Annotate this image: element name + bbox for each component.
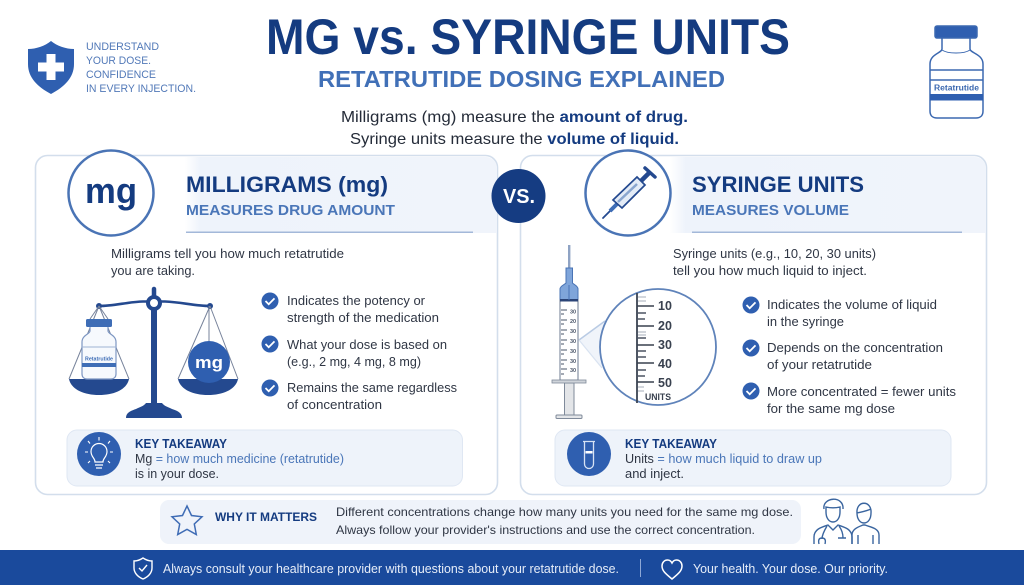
icon: heart [662, 560, 682, 579]
patient [852, 503, 879, 544]
banner text: Always follow your provider's instructions and use the correct concentration. [336, 523, 755, 537]
subtitle: RETATRUTIDE DOSING EXPLAINED [318, 66, 725, 92]
vial on scale: Retatrutide [85, 356, 113, 362]
key takeaway: milligrams [67, 430, 462, 486]
bullet: concentration [742, 340, 943, 372]
takeaway text: Units = how much liquid to draw up [625, 452, 822, 466]
brand badge [28, 41, 196, 95]
icon: mg circle [68, 150, 154, 236]
icon: mg circle: mg [85, 170, 137, 211]
description [673, 246, 876, 278]
bullet: volume: Indicates the volume of liquid [767, 297, 937, 312]
bullet: same regardless: of concentration [287, 397, 382, 412]
bullet list [262, 292, 457, 412]
icon: vial top right: Retatrutide [934, 84, 980, 92]
bullet: dose basis: (e.g., 2 mg, 4 mg, 8 mg) [287, 354, 421, 369]
brand tagline: UNDERSTAND [86, 41, 159, 53]
panel header tint [670, 157, 986, 233]
intro text [341, 109, 688, 148]
vs badge: VS. [503, 186, 535, 208]
syringe [552, 245, 586, 418]
magnifier: 20 [658, 319, 672, 333]
brand tagline: CONFIDENCE [86, 69, 156, 81]
description [111, 246, 344, 278]
syringe: 30 [570, 349, 576, 355]
magnifier [600, 289, 716, 405]
description: Milligrams tell you how much retatrutide [111, 246, 344, 261]
key takeaway: units [555, 430, 951, 486]
banner label: WHY IT MATTERS [215, 510, 317, 524]
bullet list [742, 296, 956, 416]
takeaway text: KEY TAKEAWAY [625, 437, 718, 451]
syringe: 30 [570, 339, 576, 345]
takeaway text: Mg = how much medicine (retatrutide) [135, 452, 344, 466]
description: Syringe units (e.g., 10, 20, 30 units) [673, 246, 876, 261]
footer tagline: Your health. Your dose. Our priority. [693, 561, 888, 576]
magnifier: 10 [658, 299, 672, 313]
takeaway text [135, 437, 344, 481]
bullet: potency [262, 292, 439, 325]
panel: milligrams [36, 150, 498, 494]
magnifier: 40 [658, 357, 672, 371]
bullet: dose basis: What your dose is based on [287, 337, 447, 352]
brand tagline [86, 41, 196, 95]
bullet: volume: in the syringe [767, 314, 844, 329]
icon: shield check [134, 558, 152, 579]
bullet: concentration: of your retatrutide [767, 357, 872, 372]
takeaway text: KEY TAKEAWAY [135, 437, 228, 451]
magnifier: UNITS [645, 392, 671, 402]
syringe: 30 [570, 359, 576, 365]
magnifier: 30 [658, 338, 672, 352]
icon: doctor and patient [814, 499, 879, 544]
banner text [336, 505, 793, 537]
bullet: concentration: Depends on the concentration [767, 340, 943, 355]
magnifier: 50 [658, 376, 672, 390]
bullet: volume [742, 296, 937, 329]
title: MG vs. SYRINGE UNITS [266, 9, 790, 65]
panel: syringe units [520, 150, 986, 494]
takeaway text [625, 437, 822, 481]
banner text: Different concentrations change how many units you need for the same mg dose. [336, 505, 793, 519]
panel background [520, 156, 986, 494]
mg weight: mg [195, 353, 223, 372]
vial on scale [82, 319, 116, 379]
bullet: same regardless [262, 380, 457, 412]
icon: vial top right [930, 26, 983, 118]
bullet: same regardless: Remains the same regardless [287, 380, 457, 395]
mg weight [188, 341, 230, 383]
icon: syringe circle [586, 150, 670, 236]
doctor [814, 499, 852, 544]
icon: test tube [567, 432, 611, 476]
icon: balance scale [69, 289, 238, 418]
panel background [36, 156, 498, 494]
syringe: 20 [570, 319, 576, 325]
intro text: Syringe units measure the volume of liquid. [350, 131, 679, 148]
icon: syringe with magnified scale [552, 245, 716, 418]
panel header tint [185, 157, 497, 233]
vs badge [492, 169, 546, 223]
panel heading: SYRINGE UNITS [692, 172, 864, 197]
takeaway text: is in your dose. [135, 467, 219, 481]
brand tagline: IN EVERY INJECTION. [86, 83, 196, 95]
syringe: 30 [570, 310, 576, 316]
brand tagline: YOUR DOSE. [86, 55, 151, 67]
description: tell you how much liquid to inject. [673, 263, 867, 278]
syringe: 30 [570, 368, 576, 374]
bullet: fewer units [742, 382, 956, 416]
why it matters banner [160, 500, 801, 544]
bullet: fewer units: for the same mg dose [767, 401, 895, 416]
syringe: 30 [570, 329, 576, 335]
bullet: potency: strength of the medication [287, 310, 439, 325]
panel subheading: MEASURES VOLUME [692, 202, 849, 219]
footer message: Always consult your healthcare provider with questions about your retatrutide dose. [163, 561, 619, 576]
panel subheading: MEASURES DRUG AMOUNT [186, 202, 395, 219]
icon: light bulb [77, 432, 121, 476]
footer bar [0, 550, 1024, 585]
bullet: potency: Indicates the potency or [287, 293, 426, 308]
intro text: Milligrams (mg) measure the amount of drug. [341, 109, 688, 126]
icon: star [172, 506, 202, 534]
description: you are taking. [111, 263, 195, 278]
panel heading: MILLIGRAMS (mg) [186, 172, 388, 197]
bullet: fewer units: More concentrated = fewer units [767, 384, 956, 399]
icon: shield with cross [28, 41, 74, 94]
takeaway text: and inject. [625, 467, 684, 481]
bullet: dose basis [262, 336, 447, 369]
